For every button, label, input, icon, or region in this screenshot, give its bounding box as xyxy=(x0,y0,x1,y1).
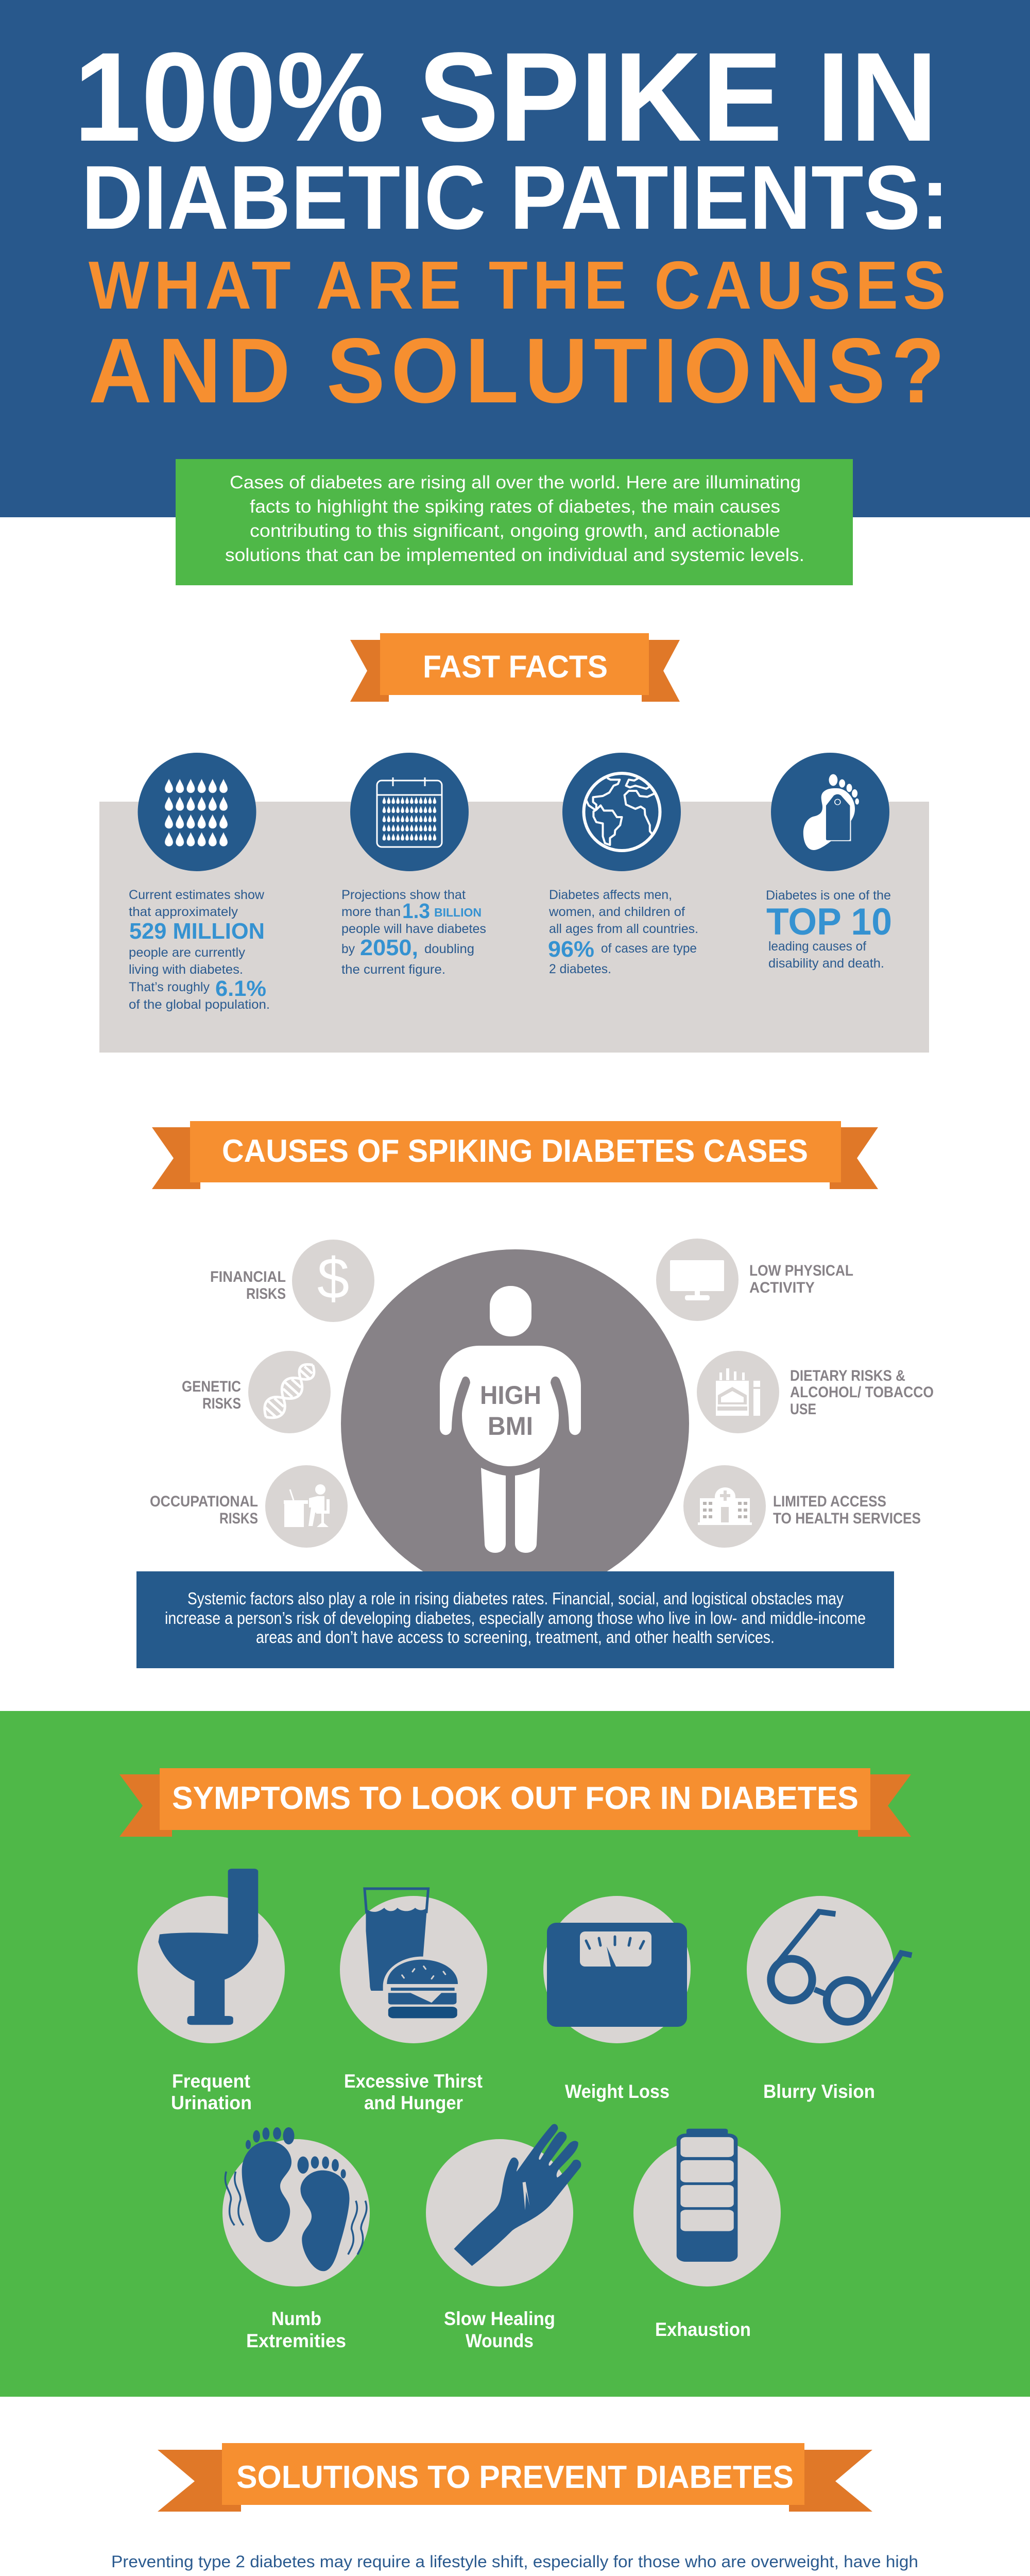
fact 2: BILLION xyxy=(434,906,482,919)
intro callout: solutions that can be implemented on individual and systemic levels. xyxy=(225,545,804,565)
symptom: slow healing wounds: Slow Healing xyxy=(444,2308,555,2329)
symptom: frequent urination xyxy=(138,1869,285,2113)
panel: header xyxy=(0,0,1030,517)
fact 4: TOP 10 xyxy=(766,901,892,943)
systemic factors callout: Systemic factors also play a role in rising diabetes rates. Financial, social, and logistical obstacles may xyxy=(187,1589,844,1608)
fact 4: leading causes of xyxy=(768,939,866,954)
symptom: frequent urination: Frequent xyxy=(172,2071,250,2092)
cause: genetic risks: GENETIC xyxy=(182,1378,241,1395)
symptom: numb extremities: Extremities xyxy=(246,2330,346,2351)
fact 3: 2 diabetes. xyxy=(549,962,611,976)
fact 1: that approximately xyxy=(129,905,238,919)
fact 2: people will have diabetes xyxy=(341,922,486,936)
panel: causes diagram xyxy=(136,1239,934,1668)
panel: fast facts xyxy=(99,753,929,1053)
cause: genetic risks xyxy=(182,1351,331,1433)
cause: limited access: LIMITED ACCESS xyxy=(773,1493,886,1510)
fact 1: living with diabetes. xyxy=(129,962,243,977)
symptom: excessive thirst and hunger: and Hunger xyxy=(364,2092,463,2113)
title: 100% SPIKE IN xyxy=(74,26,938,168)
symptom: blurry vision xyxy=(747,1896,912,2102)
symptom: numb extremities xyxy=(222,2127,370,2351)
fact 2: Projections show that xyxy=(341,888,466,902)
cause: occupational risks: RISKS xyxy=(219,1510,258,1527)
symptom: numb extremities: Numb xyxy=(271,2308,321,2329)
cause: dietary risks, alcohol and tobacco: USE xyxy=(790,1401,816,1418)
fact 3: of cases are type xyxy=(601,941,697,956)
icon: globe xyxy=(562,753,681,871)
fact 1: people are currently xyxy=(129,945,246,960)
fact 4: Diabetes is one of the xyxy=(766,888,891,903)
fact 3: 96% xyxy=(548,937,594,962)
fact 1: Current estimates show xyxy=(129,888,265,902)
cause: financial risks: FINANCIAL xyxy=(210,1268,286,1285)
cause: dietary risks, alcohol and tobacco: DIETARY RISKS & xyxy=(790,1367,905,1384)
fact 2: by xyxy=(341,942,355,956)
fact 2: 1.3 xyxy=(402,899,430,923)
banner: solutions xyxy=(158,2443,872,2512)
fact 3: women, and children of xyxy=(548,905,685,919)
fact 2: the current figure. xyxy=(341,962,445,977)
cause: low physical activity: LOW PHYSICAL xyxy=(749,1262,853,1279)
symptom: blurry vision: Blurry Vision xyxy=(763,2081,875,2102)
title: DIABETIC PATIENTS: xyxy=(81,147,949,248)
symptom: slow healing wounds xyxy=(426,2124,581,2351)
symptom: frequent urination: Urination xyxy=(171,2092,252,2113)
icon: droplets xyxy=(138,753,256,871)
symptom: excessive thirst and hunger: Excessive Thirst xyxy=(344,2071,483,2092)
banner: fast facts: FAST FACTS xyxy=(423,649,608,684)
cause: low physical activity xyxy=(656,1239,853,1321)
cause: limited access xyxy=(683,1465,921,1548)
cause: financial risks: $ xyxy=(317,1246,349,1311)
systemic factors callout xyxy=(136,1571,894,1668)
fact 1: 6.1% xyxy=(215,976,266,1001)
symptom: excessive thirst and hunger xyxy=(340,1889,487,2113)
banner: fast facts xyxy=(350,633,680,702)
cause: financial risks: RISKS xyxy=(246,1285,286,1302)
fact 3: Diabetes affects men, xyxy=(549,888,672,902)
cause: dietary risks, alcohol and tobacco: ALCOHOL/ TOBACCO xyxy=(790,1384,934,1401)
symptom: exhaustion: Exhaustion xyxy=(655,2319,751,2340)
banner: solutions: SOLUTIONS TO PREVENT DIABETES xyxy=(236,2460,794,2495)
banner: symptoms xyxy=(119,1768,911,1837)
intro callout: Cases of diabetes are rising all over the world. Here are illuminating xyxy=(230,472,801,493)
panel: symptoms xyxy=(0,1711,1030,2397)
fact 2: doubling xyxy=(424,942,474,956)
high bmi figure xyxy=(341,1249,689,1598)
banner: causes: CAUSES OF SPIKING DIABETES CASES xyxy=(222,1133,808,1169)
high bmi figure: HIGH xyxy=(480,1381,541,1410)
cause: dietary risks, alcohol and tobacco xyxy=(697,1351,934,1433)
symptom: slow healing wounds: Wounds xyxy=(466,2330,534,2351)
title: WHAT ARE THE CAUSES xyxy=(89,247,951,323)
systemic factors callout: increase a person’s risk of developing diabetes, especially among those who live in low- and middle-income xyxy=(165,1608,866,1628)
icon: foot with tag xyxy=(771,753,889,871)
banner: symptoms: SYMPTOMS TO LOOK OUT FOR IN DIABETES xyxy=(172,1781,859,1816)
intro callout: contributing to this significant, ongoing growth, and actionable xyxy=(250,521,780,541)
intro callout xyxy=(176,459,853,585)
cause: financial risks xyxy=(210,1240,374,1322)
cause: occupational risks xyxy=(150,1465,348,1548)
solutions intro text: Preventing type 2 diabetes may require a lifestyle shift, especially for those who are overweight, have high xyxy=(111,2552,918,2571)
banner: causes xyxy=(152,1121,878,1189)
cause: low physical activity: ACTIVITY xyxy=(749,1279,815,1296)
fact 1: 529 MILLION xyxy=(129,919,265,944)
fact 4 xyxy=(766,753,892,971)
symptom: weight loss: Weight Loss xyxy=(565,2081,670,2102)
fact 1: That’s roughly xyxy=(129,980,210,994)
icon: calendar xyxy=(350,753,469,871)
intro callout: facts to highlight the spiking rates of diabetes, the main causes xyxy=(250,497,780,517)
fact 2: more than xyxy=(341,905,401,919)
cause: limited access: TO HEALTH SERVICES xyxy=(773,1510,921,1527)
symptom: exhaustion xyxy=(633,2129,781,2340)
fact 3 xyxy=(548,753,698,976)
fact 4: disability and death. xyxy=(768,956,884,971)
cause: genetic risks: RISKS xyxy=(202,1395,241,1412)
fact 2: 2050, xyxy=(360,935,418,960)
title xyxy=(74,26,951,422)
fact 1: of the global population. xyxy=(129,997,270,1012)
fact 2 xyxy=(341,753,486,977)
symptom: weight loss xyxy=(543,1896,691,2102)
fact 3: all ages from all countries. xyxy=(549,922,698,936)
cause: occupational risks: OCCUPATIONAL xyxy=(150,1493,258,1510)
title: AND SOLUTIONS? xyxy=(89,319,951,422)
fact 1 xyxy=(129,753,270,1012)
systemic factors callout: areas and don’t have access to screening, treatment, and other health services. xyxy=(256,1628,775,1647)
high bmi figure: BMI xyxy=(488,1412,533,1440)
